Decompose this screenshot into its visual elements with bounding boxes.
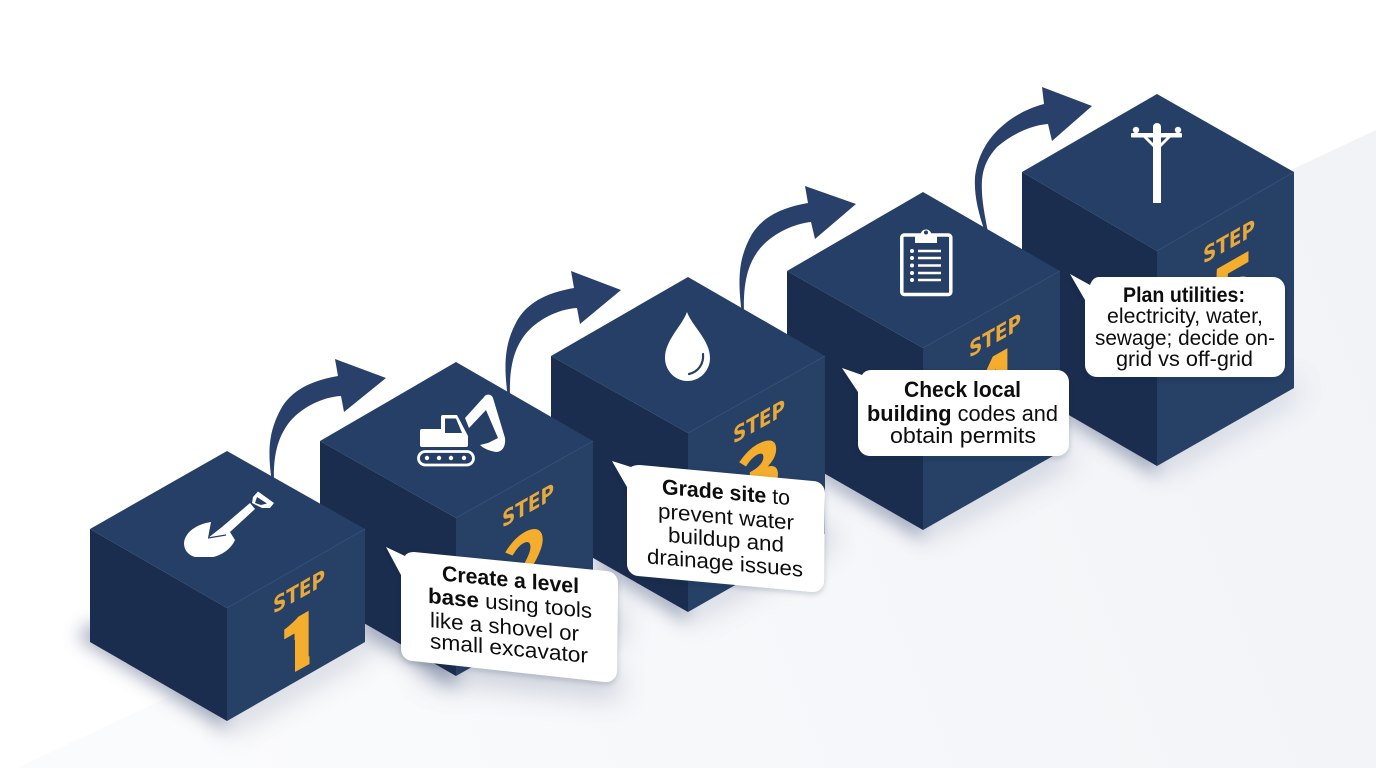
- cube 1: [90, 451, 365, 721]
- icon: clipboard: [902, 230, 951, 294]
- callout: step 5: [1070, 274, 1285, 377]
- step label 3: STEP: [733, 394, 785, 450]
- digit 1: 1: [278, 571, 322, 707]
- digit 3: 3: [737, 399, 781, 535]
- callout: step 3: [612, 461, 825, 592]
- callout: step 5: electricity, water,: [1107, 304, 1263, 328]
- callout: step 2: base using tools: [428, 584, 592, 623]
- arrow 2: [505, 271, 621, 398]
- callout: step 4: building codes and: [867, 401, 1058, 426]
- cube 4: [787, 192, 1060, 530]
- callout: step 3: prevent water: [658, 499, 794, 535]
- cube 2: [320, 362, 593, 676]
- callout: step 3: drainage issues: [647, 544, 803, 582]
- icon: shovel: [184, 492, 274, 557]
- callout: step 3: buildup and: [668, 523, 784, 557]
- icon: excavator: [418, 395, 505, 465]
- step label 1: STEP: [273, 564, 325, 620]
- callout: step 5: Plan utilities:: [1123, 283, 1245, 307]
- callout: step 2: small excavator: [430, 629, 588, 668]
- callout: step 4: obtain permits: [890, 423, 1036, 448]
- icon: utility pole: [1131, 123, 1182, 203]
- callout: step 4: Check local: [904, 377, 1021, 402]
- step label 2: STEP: [502, 478, 554, 534]
- cube 3: [551, 277, 825, 612]
- arrow 4: [975, 87, 1092, 232]
- digit 2: 2: [504, 487, 548, 623]
- callout: step 3: Grade site to: [662, 475, 790, 510]
- cube 5: [1022, 94, 1294, 466]
- digit 4: 4: [971, 311, 1015, 447]
- arrow 3: [739, 186, 856, 314]
- step label 4: STEP: [969, 308, 1021, 364]
- icon: water drop: [665, 312, 710, 381]
- callout: step 4: [842, 368, 1069, 456]
- digit 5: 5: [1210, 215, 1254, 351]
- arrow 1: [269, 359, 386, 482]
- callout: step 2: Create a level: [442, 562, 579, 598]
- step label 5: STEP: [1203, 214, 1255, 270]
- callout: step 2: [386, 547, 618, 682]
- callout: step 5: sewage; decide on-: [1095, 326, 1275, 350]
- cube shadows: [78, 378, 1298, 735]
- callout: step 2: like a shovel or: [430, 608, 579, 646]
- callout: step 5: grid vs off-grid: [1116, 347, 1253, 371]
